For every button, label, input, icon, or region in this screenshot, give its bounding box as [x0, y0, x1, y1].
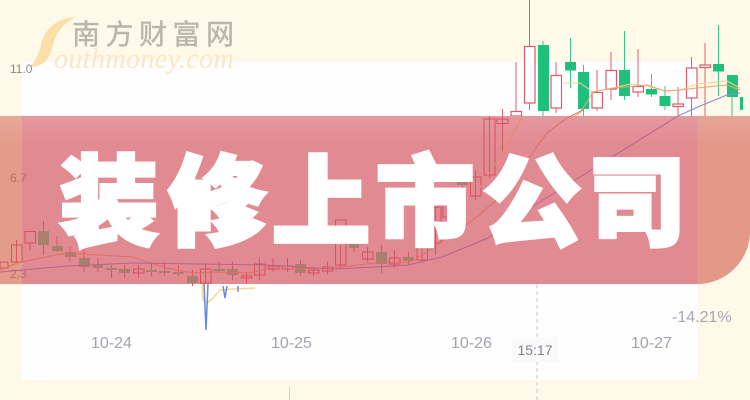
candlesticks in banner: [0, 110, 678, 286]
panel: white chart area: [22, 62, 697, 380]
crosshair line: [536, 284, 538, 400]
upper candlesticks: [502, 0, 743, 123]
x axis labels: 10-27: [631, 335, 672, 352]
axis label: 2.3: 2.3: [10, 267, 27, 281]
title: 装修上市公司: [60, 124, 686, 266]
x axis labels: 10-24: [91, 335, 132, 352]
tick: [288, 387, 290, 400]
logo chinese name: 南方财富网: [72, 19, 240, 50]
axis label: 6.7: 6.7: [10, 171, 27, 185]
crosshair time label: [512, 337, 558, 362]
icon: swoosh S: [30, 17, 76, 67]
logo: southmoney watermark: [30, 17, 240, 75]
axis label: 11.0: 11.0: [10, 62, 33, 76]
x axis labels: 10-25: [271, 335, 312, 352]
crosshair time label: 15:17: [517, 342, 553, 358]
logo latin name: outhmoney.com: [54, 44, 234, 75]
percentage label: -14.21%: [672, 309, 732, 326]
x axis labels: [91, 335, 672, 352]
band: red title banner: [0, 116, 750, 284]
x axis labels: 10-26: [451, 335, 492, 352]
lower volume spike: [202, 284, 255, 330]
